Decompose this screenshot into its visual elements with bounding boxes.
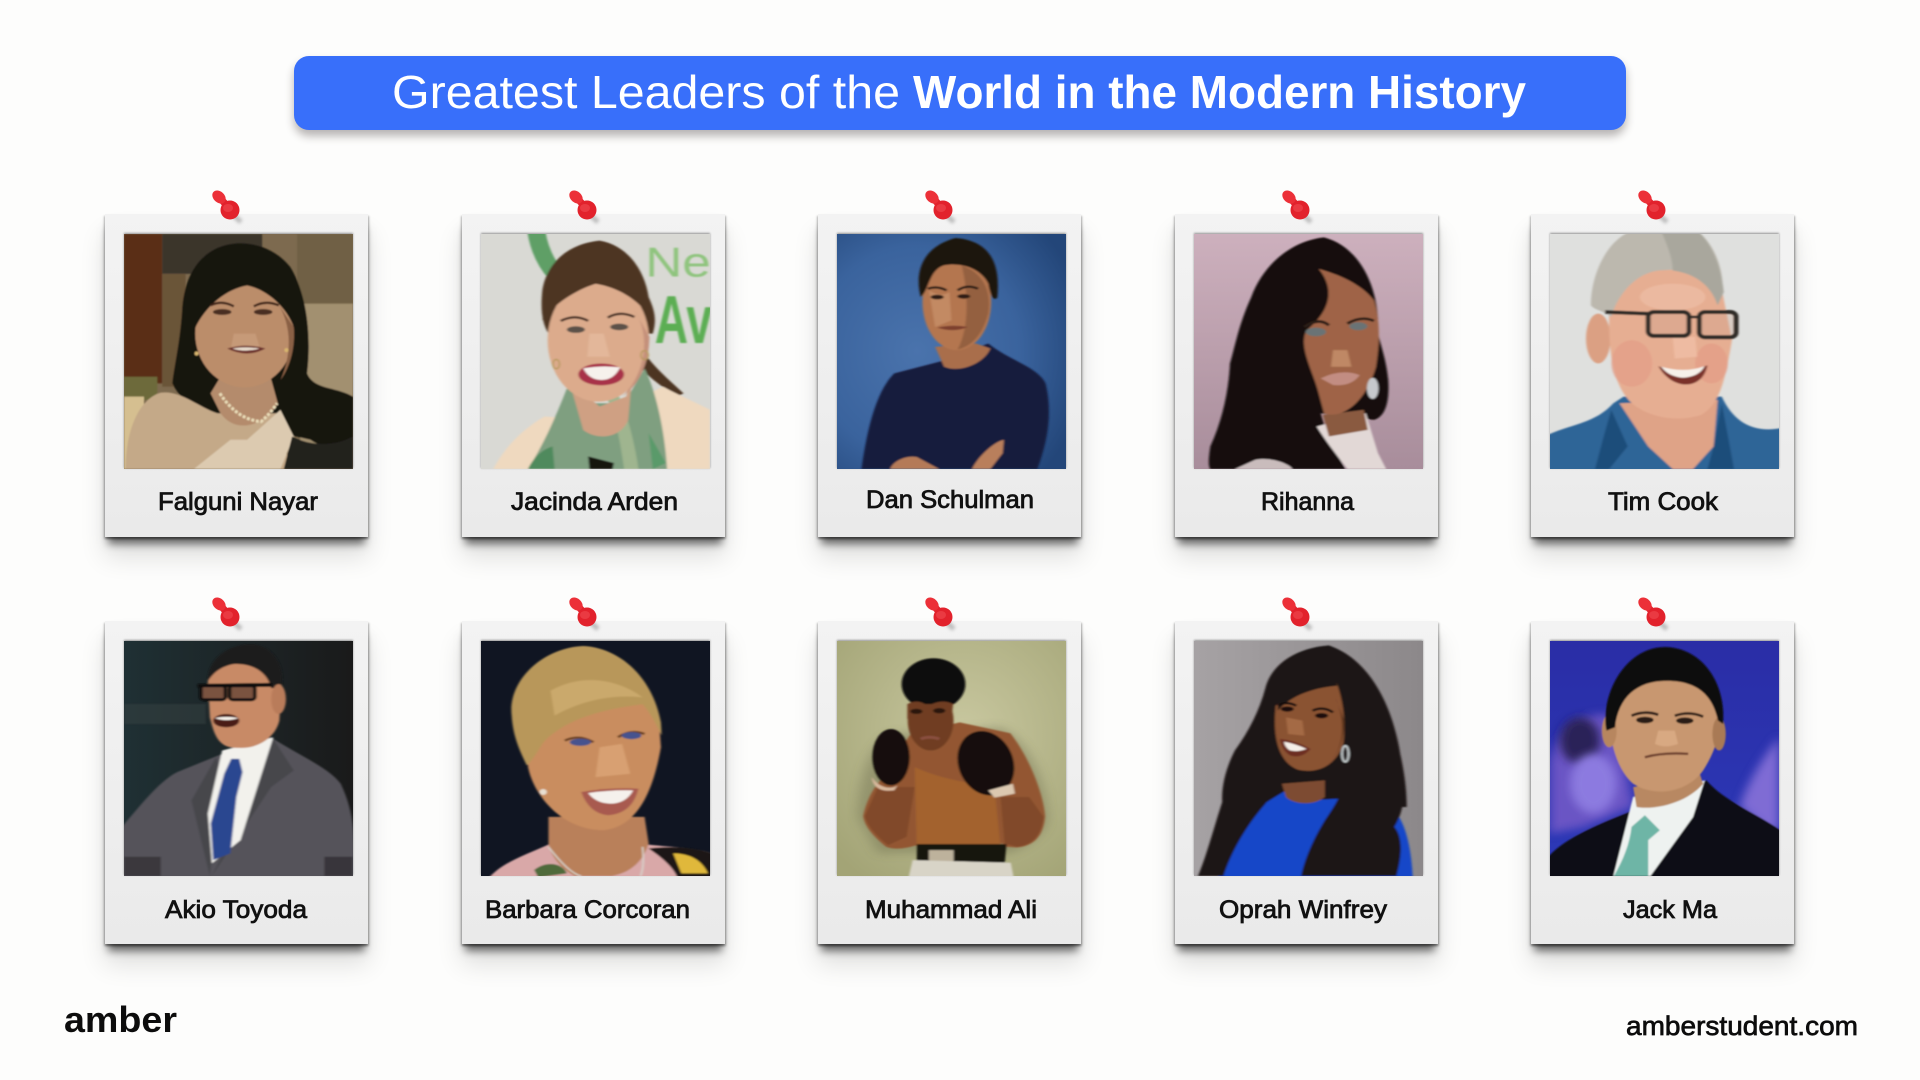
label: Tim Cook: Tim Cook <box>1608 488 1719 516</box>
card: Rihanna <box>1175 214 1438 537</box>
label: Dan Schulman: Dan Schulman <box>866 486 1034 514</box>
icon: red push pin <box>569 190 600 224</box>
card: Jacinda Arden <box>462 214 725 537</box>
photo: Tim Cook portrait <box>1550 234 1779 469</box>
icon: red push pin <box>212 190 244 224</box>
card: Akio Toyoda <box>105 621 368 944</box>
label: Jack Ma: Jack Ma <box>1623 896 1717 924</box>
icon: red push pin <box>569 598 600 632</box>
label: Akio Toyoda: Akio Toyoda <box>165 896 307 924</box>
title banner: World in the Modern History <box>913 66 1526 118</box>
title banner <box>294 56 1626 130</box>
label: Jacinda Arden: Jacinda Arden <box>511 488 678 516</box>
label: Oprah Winfrey: Oprah Winfrey <box>1219 896 1388 924</box>
photo: Jack Ma portrait <box>1550 641 1779 876</box>
card: Falguni Nayar <box>105 214 368 537</box>
label: Falguni Nayar: Falguni Nayar <box>158 488 318 516</box>
card: Jack Ma <box>1531 621 1794 944</box>
card: Muhammad Ali <box>818 621 1081 944</box>
label: Rihanna: Rihanna <box>1261 488 1354 516</box>
icon: red push pin <box>1282 598 1314 632</box>
card: Oprah Winfrey <box>1175 621 1438 944</box>
photo: Rihanna portrait <box>1194 234 1423 469</box>
title banner: Greatest Leaders of the <box>392 66 900 118</box>
icon: red push pin <box>212 598 244 632</box>
photo: Oprah Winfrey portrait <box>1194 641 1423 876</box>
photo: Jacinda Arden portrait <box>481 234 710 469</box>
label: Barbara Corcoran: Barbara Corcoran <box>485 896 690 924</box>
card: Tim Cook <box>1531 214 1794 537</box>
website: amberstudent.com: amberstudent.com <box>1626 1011 1858 1041</box>
icon: red push pin <box>1638 190 1670 224</box>
icon: red push pin <box>925 598 956 632</box>
label: Muhammad Ali: Muhammad Ali <box>865 896 1037 924</box>
card: Dan Schulman <box>818 214 1081 537</box>
icon: red push pin <box>925 190 956 224</box>
brand logo: amber: amber <box>64 1000 177 1040</box>
photo: Barbara Corcoran portrait <box>481 641 710 876</box>
photo: Akio Toyoda portrait <box>124 641 353 876</box>
icon: red push pin <box>1638 598 1670 632</box>
photo: Muhammad Ali portrait <box>837 641 1066 876</box>
icon: red push pin <box>1282 190 1314 224</box>
photo: Falguni Nayar portrait <box>124 234 353 469</box>
card: Barbara Corcoran <box>462 621 725 944</box>
photo: Dan Schulman portrait <box>837 234 1066 469</box>
photo: Jacinda Arden portrait: Ne <box>645 239 710 285</box>
